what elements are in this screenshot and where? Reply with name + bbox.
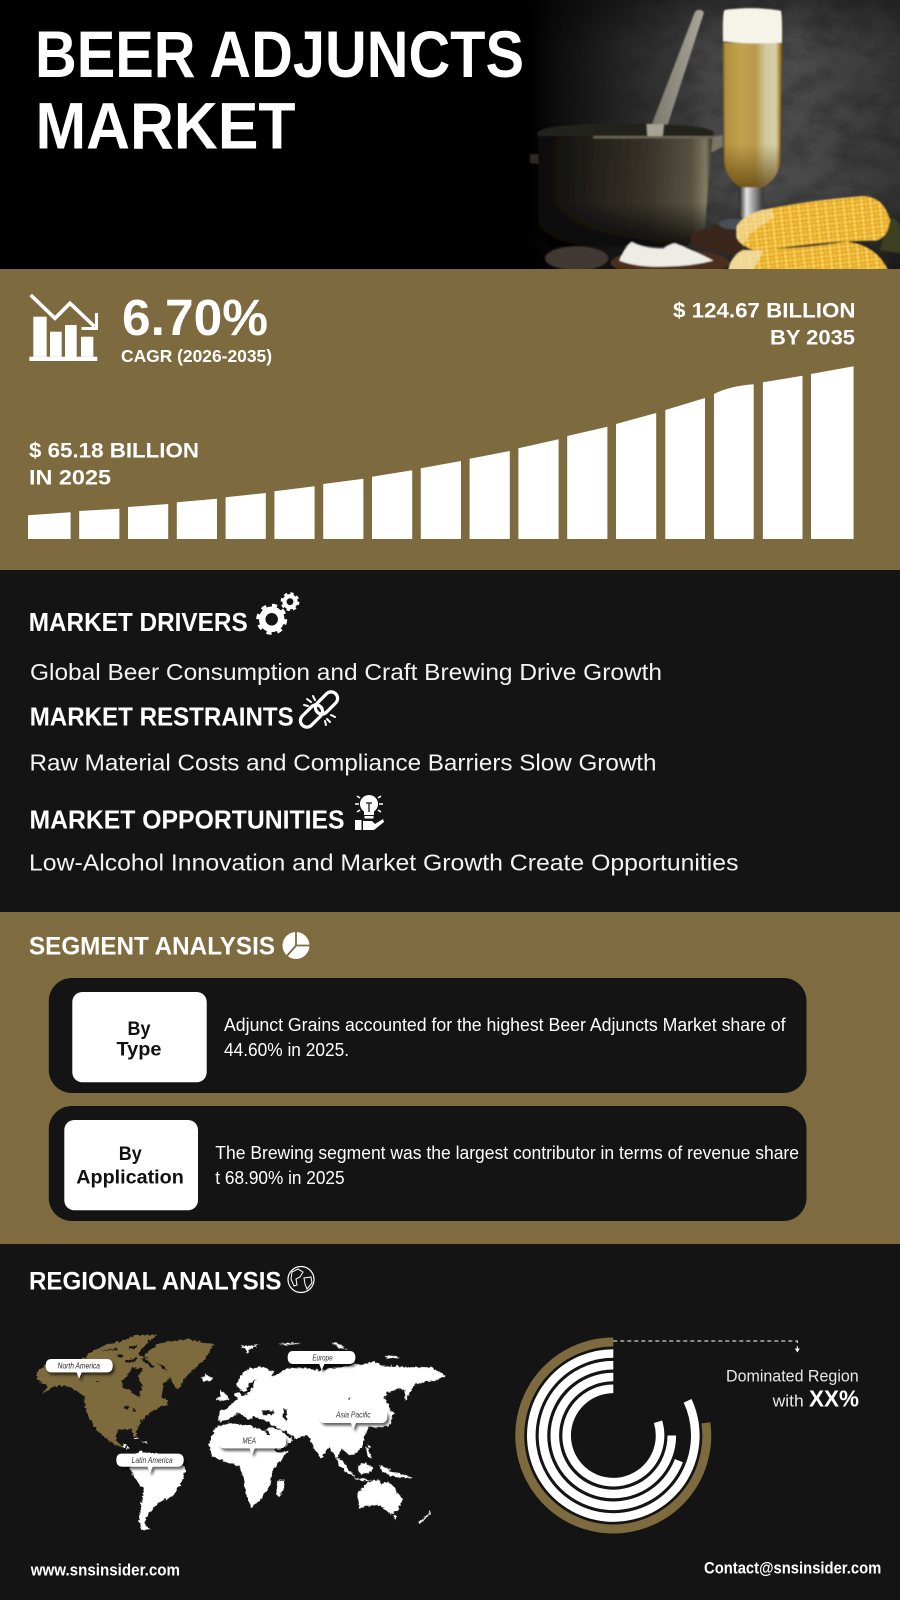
card: by application: By bbox=[119, 1143, 142, 1165]
callout labels: Asia Pacific bbox=[335, 1410, 371, 1420]
card: by type bbox=[49, 978, 807, 1093]
website: www.snsinsider.com bbox=[30, 1561, 180, 1579]
callout labels: North America bbox=[58, 1360, 100, 1370]
icon: globe bbox=[288, 1266, 314, 1292]
heading: segment analysis: SEGMENT ANALYSIS bbox=[29, 932, 275, 960]
CAGR value: 6.70% bbox=[122, 289, 268, 346]
header panel bbox=[0, 0, 900, 276]
title: MARKET bbox=[36, 90, 296, 162]
dashed leader arrow bbox=[613, 1341, 800, 1352]
callout labels: Europe bbox=[312, 1352, 333, 1362]
heading: regional analysis: REGIONAL ANALYSIS bbox=[29, 1267, 282, 1295]
region: Latin America, Europe, Asia and Africa bbox=[122, 1342, 444, 1529]
icon: broken chain bbox=[298, 689, 340, 730]
dominated region label: XX% bbox=[809, 1386, 859, 1412]
radial chart: dominated region bbox=[520, 1342, 707, 1529]
base value bbox=[29, 438, 199, 490]
text: drivers: Global Beer Consumption and Craft Brewing Drive Growth bbox=[30, 659, 662, 685]
contact email: Contact@snsinsider.com bbox=[704, 1559, 881, 1577]
text: restraints: Raw Material Costs and Compliance Barriers Slow Growth bbox=[30, 750, 656, 776]
heading: market restraints: MARKET RESTRAINTS bbox=[30, 704, 294, 732]
card: by type: Type bbox=[116, 1038, 162, 1060]
inland seas bbox=[219, 1396, 350, 1451]
icon: hand with light bulb bbox=[355, 795, 384, 830]
title bbox=[35, 18, 524, 162]
forecast value bbox=[673, 298, 856, 350]
icon: gears bbox=[258, 594, 298, 633]
card: by type: 44.60% in 2025. bbox=[224, 1040, 349, 1060]
dominated region label: with bbox=[772, 1393, 804, 1411]
text: opportunities: Low-Alcohol Innovation and Market Growth Create Opportunities bbox=[29, 850, 738, 876]
card: by application bbox=[49, 1106, 807, 1221]
heading: market drivers: MARKET DRIVERS bbox=[29, 609, 248, 637]
panel: regional analysis bbox=[0, 1244, 900, 1600]
bar chart: market growth bbox=[28, 366, 854, 539]
panel: segment analysis bbox=[0, 912, 900, 1244]
callouts: region names bbox=[46, 1351, 387, 1473]
card: by type: By bbox=[128, 1018, 151, 1040]
card: by application: t 68.90% in 2025 bbox=[215, 1168, 345, 1188]
icon: pie chart bbox=[282, 930, 311, 959]
CAGR value: CAGR (2026-2035) bbox=[121, 346, 272, 366]
card: by type: Adjunct Grains accounted for the highest Beer Adjuncts Market share of bbox=[224, 1015, 786, 1035]
callout labels: Latin America bbox=[132, 1455, 173, 1465]
world map bbox=[35, 1334, 444, 1529]
card: by application: The Brewing segment was the largest contributor in terms of revenue share bbox=[215, 1143, 799, 1163]
forecast value: $ 124.67 BILLION bbox=[673, 298, 856, 322]
callout labels: MEA bbox=[242, 1435, 256, 1445]
callout labels bbox=[58, 1352, 371, 1465]
icon: chart with trend arrow bbox=[29, 295, 97, 361]
header photo: pot, beer glass and corn bbox=[530, 0, 900, 276]
base value: IN 2025 bbox=[29, 466, 111, 490]
region: North America and Greenland bbox=[35, 1334, 213, 1447]
panel: market size bbox=[0, 269, 900, 570]
lakes and channels bbox=[96, 1344, 153, 1441]
heading: market opportunities: MARKET OPPORTUNITIES bbox=[30, 807, 344, 835]
panel: market dynamics bbox=[0, 570, 900, 912]
card: by application: Application bbox=[76, 1166, 184, 1188]
dominated region label bbox=[726, 1367, 859, 1412]
forecast value: BY 2035 bbox=[770, 326, 855, 350]
title: BEER ADJUNCTS bbox=[35, 18, 524, 91]
dominated region label: Dominated Region bbox=[726, 1367, 859, 1385]
base value: $ 65.18 BILLION bbox=[29, 438, 199, 462]
